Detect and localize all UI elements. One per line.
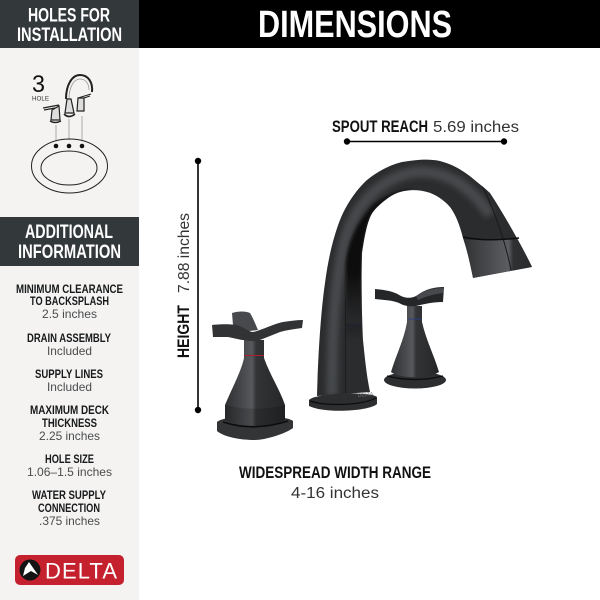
faucet spout <box>309 160 532 411</box>
right handle <box>375 287 446 388</box>
icon: three-hole faucet and sink diagram: HOLE <box>32 96 50 102</box>
left handle <box>212 312 303 440</box>
dimension: height: HEIGHT <box>175 305 193 358</box>
text block: maximum deck thickness: MAXIMUM DECK <box>30 403 109 417</box>
text block: minimum clearance <box>16 282 123 321</box>
logo: delta <box>15 555 124 585</box>
text block: maximum deck thickness <box>30 403 109 443</box>
icon: three-hole faucet and sink diagram <box>32 71 108 193</box>
text block: hole size: 1.06–1.5 inches <box>27 465 112 479</box>
text block: supply lines: Included <box>47 380 92 394</box>
dimension: spout reach <box>332 118 519 145</box>
heading: holes for installation <box>0 0 139 48</box>
text block: minimum clearance: 2.5 inches <box>42 307 97 321</box>
text block: minimum clearance: MINIMUM CLEARANCE <box>16 282 123 296</box>
text block: water supply connection <box>32 488 106 528</box>
dimension: height: 7.88 inches <box>176 213 193 293</box>
text block: drain assembly <box>27 331 111 358</box>
heading: additional information <box>0 217 139 266</box>
title: DIMENSIONS <box>258 4 452 46</box>
text block: water supply connection: .375 inches <box>39 514 100 528</box>
logo: delta: DELTA <box>45 558 117 584</box>
dimension: height <box>175 158 201 413</box>
text block: maximum deck thickness: THICKNESS <box>42 416 97 430</box>
icon: three-hole faucet and sink diagram: 3 <box>32 71 45 98</box>
text block: maximum deck thickness: 2.25 inches <box>39 429 100 443</box>
heading: holes for installation: HOLES FOR <box>28 6 110 26</box>
dimension: widespread width range: WIDESPREAD WIDTH RANGE <box>239 464 431 482</box>
text block: drain assembly: Included <box>47 344 92 358</box>
faucet spout: DELTA <box>358 391 374 399</box>
text block: water supply connection: CONNECTION <box>38 501 100 515</box>
dimension: widespread width range: 4-16 inches <box>291 485 379 502</box>
header: dimensions banner <box>139 0 600 48</box>
heading: additional information: ADDITIONAL <box>25 222 113 243</box>
text block: supply lines <box>35 367 103 394</box>
dimension: widespread width range <box>239 464 431 502</box>
panel: sidebar background <box>0 0 139 600</box>
heading: additional information: INFORMATION <box>18 242 121 263</box>
text block: supply lines: SUPPLY LINES <box>35 367 103 381</box>
text block: hole size <box>27 452 112 479</box>
text block: hole size: HOLE SIZE <box>45 452 94 466</box>
dimension: spout reach: SPOUT REACH <box>332 118 428 136</box>
heading: holes for installation: INSTALLATION <box>17 25 122 46</box>
dimension: spout reach: 5.69 inches <box>433 119 519 136</box>
text block: water supply connection: WATER SUPPLY <box>32 488 106 502</box>
text block: drain assembly: DRAIN ASSEMBLY <box>27 331 111 345</box>
text block: minimum clearance: TO BACKSPLASH <box>30 294 109 308</box>
